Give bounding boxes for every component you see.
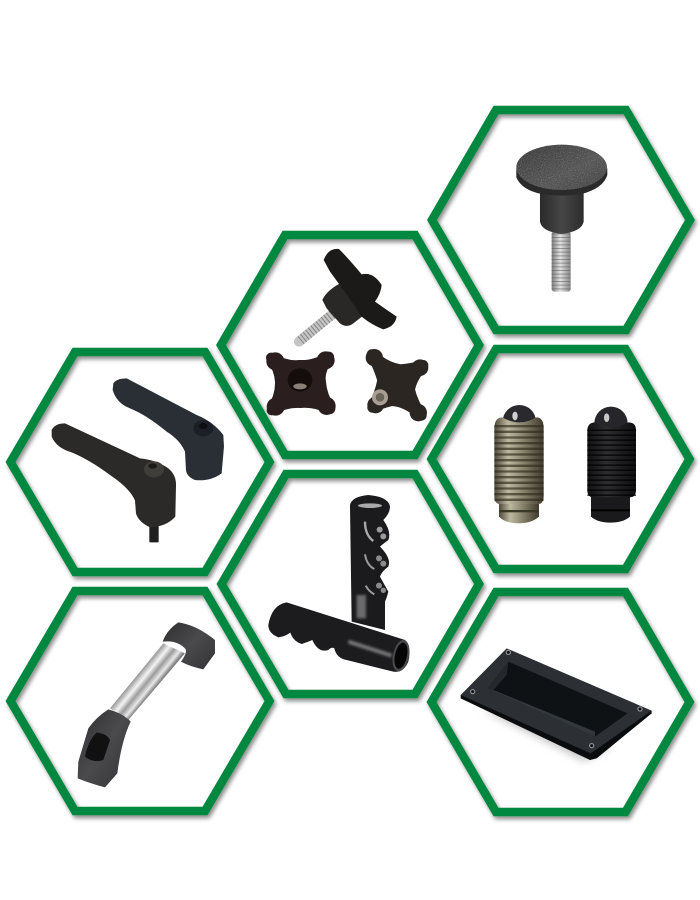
product: two glossy finger grips bbox=[268, 495, 412, 673]
hexagon frame bbox=[432, 110, 690, 330]
product: two clamping levers bbox=[52, 378, 224, 542]
panel: left adjustable levers bbox=[10, 352, 270, 572]
panel: bottom right recessed pull bbox=[432, 592, 690, 812]
hexagon frame bbox=[10, 352, 270, 572]
hexagon frame bbox=[432, 349, 690, 569]
hexagon frame bbox=[432, 592, 690, 812]
panel: center top star knobs bbox=[221, 235, 479, 455]
hexagon frame bbox=[10, 591, 270, 811]
product: recessed tray handle bbox=[461, 648, 652, 762]
product: tubular bridge handle bbox=[78, 622, 215, 787]
hexagon frame bbox=[222, 474, 479, 694]
panel: bottom center vinyl grips bbox=[222, 474, 479, 694]
hexagon frame bbox=[221, 235, 479, 455]
panel: top right knob bbox=[432, 110, 690, 330]
product: brass and black spring plungers bbox=[494, 405, 636, 523]
panel: bottom left bridge handle bbox=[10, 591, 270, 811]
product: round head screw knob bbox=[516, 145, 607, 292]
product: three star knobs bbox=[266, 249, 428, 421]
panel: right ball plungers bbox=[432, 349, 690, 569]
